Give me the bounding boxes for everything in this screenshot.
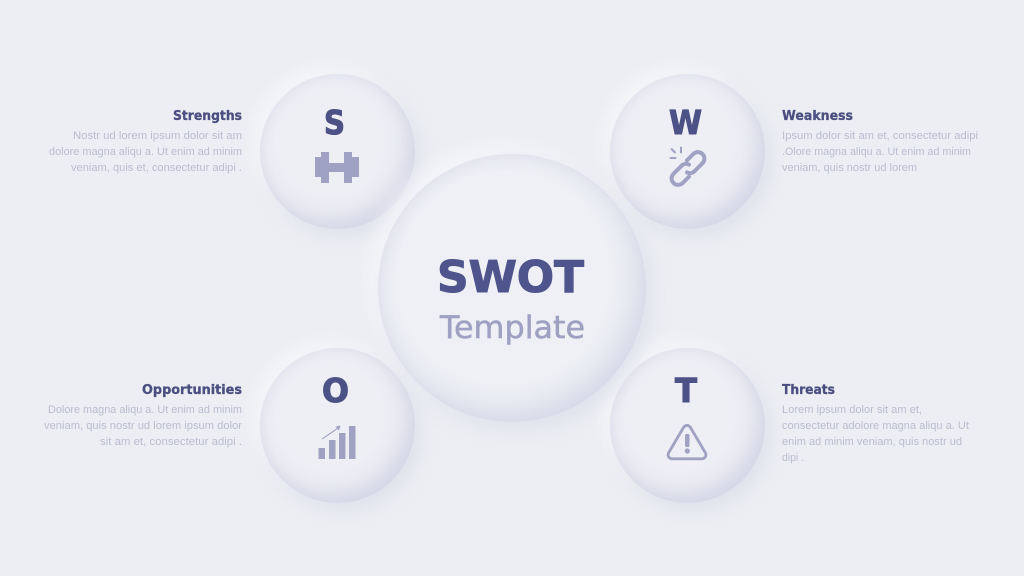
panel: center SWOT circle	[378, 154, 650, 428]
icon: broken link	[669, 148, 707, 188]
icon: growth chart	[318, 426, 356, 459]
text: opportunities: veniam, quis nostr ud lorem ipsum dolor	[44, 420, 242, 432]
circle: strengths	[260, 74, 415, 229]
text: strengths: Nostr ud lorem ipsum dolor sit am	[73, 130, 242, 142]
text: strengths: dolore magna aliqu a. Ut enim ad minim	[49, 146, 242, 158]
circle: opportunities	[260, 348, 415, 503]
icon: dumbbell	[315, 152, 359, 183]
text: threats	[782, 383, 969, 464]
text: weakness: .Olore magna aliqu a. Ut enim ad minim	[782, 146, 971, 158]
panel: opportunities	[44, 348, 419, 508]
letter and icon: threats	[666, 371, 708, 460]
text: threats: consectetur adolore magna aliqu a. Ut	[782, 420, 969, 432]
circle: weakness	[610, 74, 765, 229]
text: opportunities	[44, 383, 242, 448]
text: threats: Threats	[782, 383, 835, 398]
text: threats: dipi .	[782, 452, 804, 464]
text: strengths: veniam, quis et, consectetur adipi .	[71, 162, 242, 174]
title: SWOT Template: SWOT	[437, 252, 584, 303]
text: opportunities: sit am et, consectetur adipi .	[100, 436, 242, 448]
text: weakness: Weakness	[782, 109, 853, 124]
text: weakness: Ipsum dolor sit am et, consectetur adipi	[782, 130, 978, 142]
text: opportunities: Opportunities	[142, 383, 242, 398]
letter and icon: opportunities: O	[322, 371, 349, 410]
circle: center	[378, 154, 646, 422]
panel: strengths	[49, 74, 418, 234]
title: SWOT Template	[437, 252, 585, 346]
text: strengths	[49, 109, 242, 174]
title: SWOT Template: Template	[439, 310, 585, 346]
circle: threats	[610, 348, 765, 503]
text: weakness	[782, 109, 978, 174]
letter and icon: opportunities	[318, 371, 356, 459]
letter and icon: strengths: S	[324, 103, 345, 142]
icon: warning triangle	[668, 425, 706, 459]
letter and icon: weakness	[669, 103, 706, 187]
letter and icon: strengths	[315, 103, 359, 183]
text: strengths: Strengths	[173, 109, 242, 124]
letter and icon: threats: T	[675, 371, 697, 410]
text: threats: enim ad minim veniam, quis nostr ud	[782, 436, 962, 448]
text: opportunities: Dolore magna aliqu a. Ut enim ad minim	[48, 404, 242, 416]
panel: threats	[610, 348, 969, 508]
text: weakness: veniam, quis nostr ud lorem	[782, 162, 917, 174]
panel: weakness	[610, 74, 978, 234]
letter and icon: weakness: W	[669, 103, 702, 142]
text: threats: Lorem ipsum dolor sit am et,	[782, 404, 922, 416]
